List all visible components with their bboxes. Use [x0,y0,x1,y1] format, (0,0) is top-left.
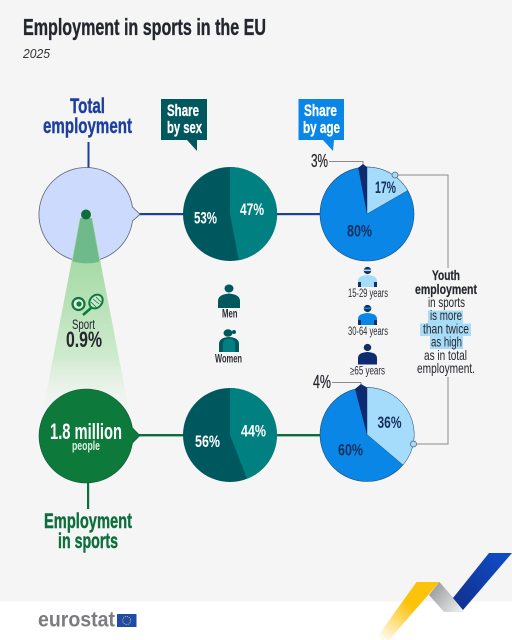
pie: share by sex, employment in sports [183,388,277,482]
pie: share by sex, total employment: 47% [240,200,264,219]
legend: 30-64 years [348,305,388,338]
connector: top row [138,213,368,215]
pie: share by sex, total employment [183,167,277,261]
subtitle: year: 2025 [22,46,51,61]
marker: sport dot [81,210,91,220]
callout: share by sex: Share [167,101,199,120]
pie: share by age, employment in sports: 60% [338,440,363,460]
heading: employment in sports: Employment [44,510,132,533]
label: sport share [66,317,102,352]
beam overlap inside total employment circle [72,218,100,263]
pie: share by sex, total employment: 53% [194,208,217,228]
connector: youth employment, bottom pie [417,377,448,444]
heading: employment in sports: in sports [58,530,118,553]
marker: youth share, top pie [392,172,398,178]
connector: bottom row [138,434,368,436]
text block: youth employment: than twice [423,320,469,336]
text block: youth employment: employment [415,281,477,297]
circle: employment in sports: people [72,439,100,453]
heading: total employment: Total [70,95,105,118]
text block: youth employment [415,267,477,376]
legend: men: Men [222,308,238,320]
label: sport share: Sport [72,317,95,332]
marker: youth share, bottom pie [410,441,416,447]
pie: share by sex, employment in sports: 44% [241,422,266,440]
callout: share by age [298,99,344,151]
callout: share by sex [161,99,207,151]
text block: youth employment: employment. [417,360,475,376]
pie: share by age, total employment: 17% [375,178,396,197]
connector: circle to employment in sports heading [87,483,89,509]
callout: share by age: Share [304,101,337,120]
legend: men [218,284,240,320]
legend: women: Women [215,354,242,366]
pie: share by age, total employment [320,164,414,261]
circle: total employment [39,167,140,261]
text block: youth employment: as in total [424,347,467,363]
icon: ball and racket [72,292,105,315]
pie: share by age, employment in sports [320,384,414,482]
circle: employment in sports [39,389,140,483]
callout: share by age: by age [303,118,340,137]
legend: 15-29 years: 15-29 years [348,288,388,300]
pie: share by age, employment in sports: 36% [378,413,402,432]
text block: youth employment: Youth [432,267,460,283]
legend: women [215,329,242,366]
logo: eurostat: eurostat [38,608,115,632]
legend: 15-29 years [348,267,388,300]
circle: employment in sports: 1.8 million [50,419,122,444]
text block: youth employment: in sports [428,294,465,310]
label: sport share: 0.9% [66,327,102,352]
text block: youth employment: as high [431,334,462,350]
heading: total employment [43,95,132,138]
pie: share by age, total employment: 80% [347,222,372,240]
heading: total employment: employment [43,115,132,138]
title: Employment in sports in the EU [23,14,266,40]
label: 3%: 3% [311,151,328,171]
connector: heading to total employment circle [88,142,90,168]
legend: 30-64 years: 30-64 years [348,326,388,338]
callout: share by sex: by sex [167,118,202,137]
connector: 3% label [329,162,363,166]
heading: employment in sports [44,510,132,553]
connector: youth employment, top pie [395,175,448,268]
decoration: eurostat chevron [375,553,512,640]
beam: sport share of total employment [43,218,129,410]
label: 4%: 4% [313,372,331,392]
connector: 4% label [332,382,361,386]
text block: youth employment: is more [430,307,462,323]
legend: 65 years and over: ≥65 years [350,366,385,378]
legend: 65 years and over [350,344,385,378]
pie: share by sex, employment in sports: 56% [195,432,220,451]
